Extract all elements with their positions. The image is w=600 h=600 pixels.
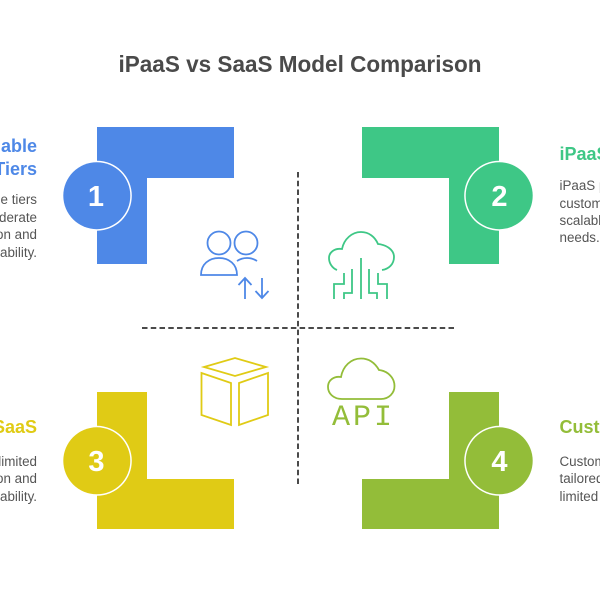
panel: customized SaaS [328,358,600,529]
corner shape 1 [97,127,234,264]
panel: iPaaS [329,127,600,299]
icon: API cloud: API [332,401,395,435]
number badge 4 [464,426,534,496]
description 2: needs. [560,230,600,245]
icon: cloud with circuit traces [329,232,394,299]
corner shape 3 [97,392,234,529]
corner shape 2 [362,127,499,264]
number badge 1: 1 [88,181,104,213]
number badge 3 [62,426,132,496]
number badge 2 [464,161,534,231]
number badge 2: 2 [491,181,508,213]
corner shape 4 [362,392,499,529]
number badge 4: 4 [491,446,508,478]
title: iPaaS vs SaaS Model Comparison [118,51,482,77]
number badge 3: 3 [88,446,105,478]
icon: API cloud [328,358,395,435]
panel: basic SaaS [0,358,268,529]
icon: users with arrows [201,232,268,299]
panel: scalable SaaS tiers [0,127,268,299]
icon: open box [202,358,268,425]
number badge 1 [62,161,132,231]
